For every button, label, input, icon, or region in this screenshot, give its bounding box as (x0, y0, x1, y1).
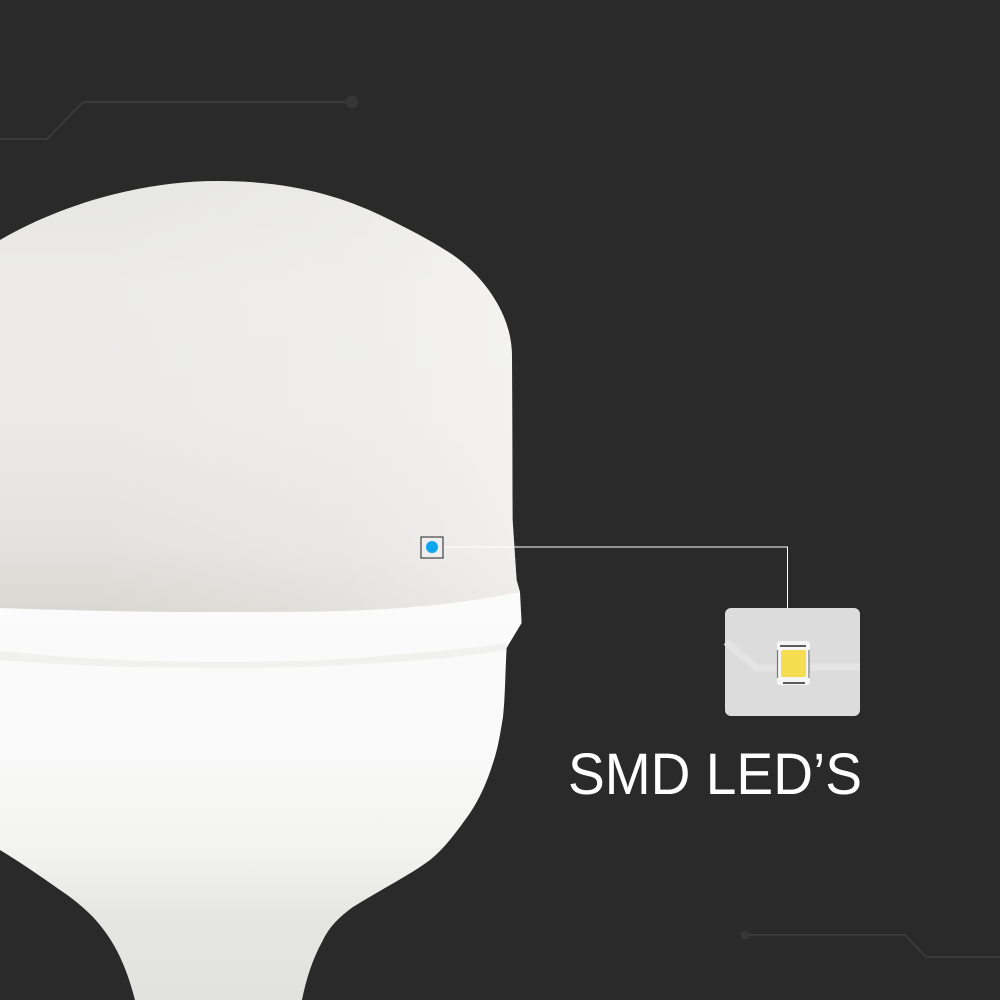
chip housing (777, 641, 810, 685)
label: SMD LED’S (568, 742, 862, 807)
marker: blue dot (421, 537, 443, 558)
circuit trace (726, 642, 860, 668)
LED chip thumbnail (725, 608, 860, 716)
bulb dome (0, 181, 520, 612)
connector line (444, 547, 788, 608)
dome highlight (0, 181, 520, 612)
circuit line: bottom right (740, 930, 1000, 957)
circuit line: top left (0, 96, 358, 139)
band groove (0, 643, 506, 668)
bulb base and neck (0, 592, 522, 1000)
light bulb (0, 181, 522, 1000)
chip emitter (781, 650, 806, 677)
